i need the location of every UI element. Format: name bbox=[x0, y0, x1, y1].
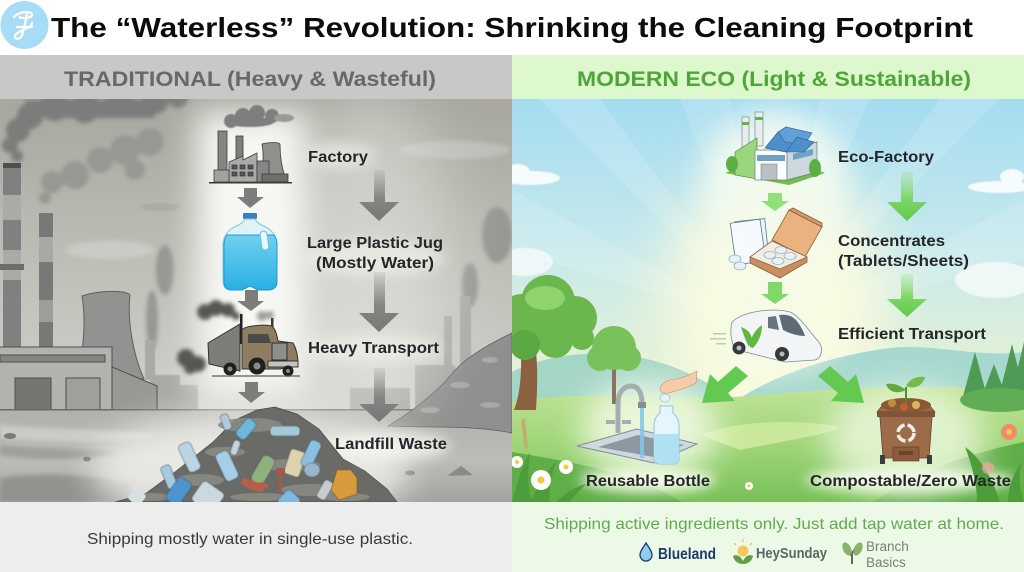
arrow: concentrates to van bbox=[761, 282, 789, 304]
icon: eco factory with solar panels bbox=[725, 112, 825, 185]
traditional heading: TRADITIONAL (Heavy & Wasteful) bbox=[64, 68, 436, 91]
sun rays bbox=[512, 99, 1024, 236]
traditional footer: Shipping mostly water in single-use plastic. bbox=[87, 531, 413, 548]
arrow: jug to truck bbox=[237, 290, 264, 311]
arrow: big arrow factory to jug bbox=[359, 170, 399, 221]
label: Compostable/Zero Waste: Compostable/Zero Waste bbox=[810, 473, 1011, 490]
title: The “Waterless” Revolution: Shrinking the Cleaning Footprint bbox=[51, 12, 973, 43]
modern scene bbox=[497, 99, 1024, 502]
ground bbox=[0, 410, 512, 502]
label: Large Plastic Jug bbox=[307, 235, 443, 272]
logo icon bbox=[0, 1, 48, 49]
arrow: big green arrow concentrates to transport bbox=[887, 274, 927, 317]
footer statement: Shipping active ingredients only. Just add tap water at home. bbox=[544, 516, 1004, 533]
central light glow bbox=[90, 90, 450, 528]
sun glow bbox=[665, 110, 885, 430]
brand: HeySunday: HeySunday bbox=[756, 546, 827, 562]
label: Concentrates: (Tablets/Sheets) bbox=[838, 253, 969, 270]
icon: large tree bbox=[512, 275, 597, 410]
icon: concentrates box with tablets and sheets bbox=[729, 208, 822, 278]
label highlight glows bbox=[580, 165, 1015, 495]
traditional header band bbox=[0, 55, 512, 99]
traditional footer bbox=[0, 502, 512, 572]
brand: Blueland bbox=[640, 543, 716, 563]
far industrial skyline bbox=[145, 296, 471, 412]
icon: diesel truck bbox=[177, 300, 300, 377]
meadow flowers and grass bbox=[511, 418, 1024, 502]
arrow: big arrow jug to transport bbox=[359, 272, 399, 332]
arrow: big arrow transport to landfill bbox=[359, 368, 399, 422]
icon: pine trees bbox=[960, 342, 1024, 412]
arrow: truck to landfill bbox=[238, 382, 265, 403]
label: Factory: Factory bbox=[308, 149, 368, 166]
modern heading: MODERN ECO (Light & Sustainable) bbox=[577, 68, 971, 91]
modern header band bbox=[512, 55, 1024, 99]
label: Concentrates: Concentrates bbox=[838, 233, 945, 250]
brand: Branch Basics: Branch bbox=[866, 539, 909, 554]
label: Reusable Bottle: Reusable Bottle bbox=[586, 473, 710, 490]
brand: Branch Basics bbox=[840, 539, 909, 570]
icon: landfill pile of bottles bbox=[114, 406, 398, 502]
brand: HeySunday bbox=[733, 539, 827, 564]
arrow: big green arrow eco factory to concentrates bbox=[887, 172, 927, 221]
hills bbox=[512, 347, 1022, 402]
label: Large Plastic Jug: (Mostly Water) bbox=[316, 255, 434, 272]
panel: traditional bbox=[0, 55, 512, 572]
icon: electric van bbox=[710, 310, 822, 362]
traditional scene bbox=[0, 86, 512, 528]
label: Heavy Transport: Heavy Transport bbox=[308, 340, 440, 357]
arrow: van to compost bbox=[818, 366, 864, 403]
panel: modern eco bbox=[497, 55, 1024, 572]
arrow: eco factory to concentrates bbox=[761, 193, 789, 211]
label: Landfill Waste: Landfill Waste bbox=[335, 436, 447, 453]
modern footer bbox=[512, 502, 1024, 572]
icon: compost bin bbox=[877, 377, 935, 464]
clouds bbox=[497, 164, 1024, 298]
brand: Branch Basics: Basics bbox=[866, 555, 906, 570]
chimneys bbox=[0, 163, 53, 348]
icon: small tree bbox=[587, 326, 641, 404]
factory building bbox=[0, 347, 157, 410]
smoke clouds background bbox=[2, 86, 512, 350]
icon: traditional factory bbox=[209, 105, 294, 184]
arrow: van to reusable bottle bbox=[702, 366, 748, 403]
label: Eco-Factory: Eco-Factory bbox=[838, 149, 934, 166]
label: Large Plastic Jug: Large Plastic Jug bbox=[307, 235, 443, 252]
label: Concentrates bbox=[838, 233, 969, 270]
icon: plastic jug bbox=[223, 213, 277, 290]
fields bbox=[512, 387, 1024, 502]
brand: Blueland: Blueland bbox=[658, 546, 716, 563]
label: Efficient Transport: Efficient Transport bbox=[838, 326, 987, 343]
arrow: factory to jug bbox=[237, 188, 264, 208]
gravel mound right bbox=[388, 333, 512, 433]
icon: sink tap and reusable bottle bbox=[577, 371, 697, 464]
cooling tower bbox=[76, 291, 144, 379]
